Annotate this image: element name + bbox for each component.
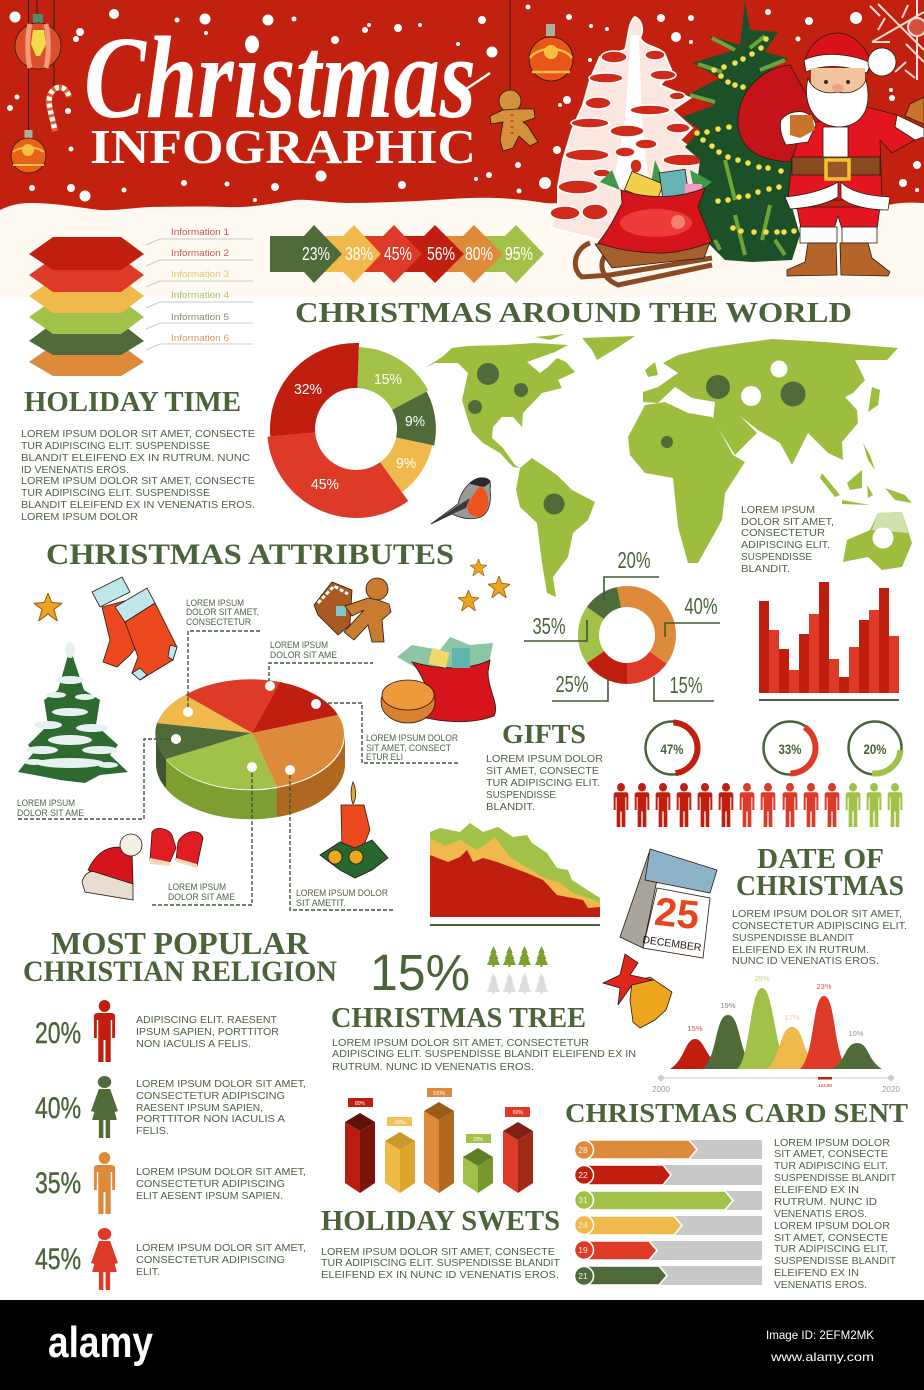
row: 20%: 20% bbox=[35, 1017, 81, 1050]
title swash bbox=[460, 73, 490, 93]
icon: stockings bbox=[92, 577, 177, 680]
percent arrow ribbon: 23% bbox=[302, 244, 330, 264]
pie labels: CONSECTETUR bbox=[186, 617, 251, 627]
bar 4: 20% bbox=[473, 1137, 484, 1143]
mountain chart: 25% bbox=[754, 974, 770, 983]
bar 5 bbox=[503, 1107, 533, 1193]
map: South America bbox=[516, 458, 595, 597]
text block: world: LOREM IPSUM bbox=[741, 504, 815, 516]
donut leaders and percent labels: 40% bbox=[684, 593, 718, 619]
text block: world: BLANDIT. bbox=[741, 563, 790, 575]
text block: swets: ELEIFEND EX IN NUNC ID VENENATIS EROS. bbox=[321, 1269, 559, 1281]
donut chart: holiday time: 32% bbox=[294, 381, 322, 398]
people pictogram row bbox=[614, 783, 902, 827]
progress bars: cards sent bbox=[574, 1140, 762, 1286]
information labels: Information 4 bbox=[171, 290, 229, 300]
mountain chart: 2000 bbox=[652, 1085, 670, 1094]
3D bar chart: holiday sweets bbox=[345, 1088, 533, 1193]
bar 4 bbox=[463, 1134, 493, 1193]
ring: 47%: 47% bbox=[660, 741, 684, 757]
mountain chart: 10% bbox=[848, 1029, 864, 1038]
icon: Santa hat bbox=[82, 834, 142, 900]
pie labels: LOREM IPSUM bbox=[17, 798, 75, 808]
pie labels: LOREM IPSUM bbox=[270, 640, 328, 650]
text block: gifts: SUSPENDISSE bbox=[486, 789, 556, 801]
heading: Most popular Christian religion: MOST POPULAR bbox=[51, 925, 310, 961]
bar 1: 80% bbox=[355, 1101, 366, 1107]
pie labels: DOLOR SIT AME bbox=[168, 892, 235, 902]
row: 45% bbox=[35, 1228, 306, 1290]
text block: cards: VENENATIS EROS. bbox=[774, 1279, 867, 1291]
donut leaders and percent labels: 25% bbox=[556, 671, 588, 697]
row: 40% bbox=[35, 1076, 306, 1138]
bar 5: 60% bbox=[513, 1110, 524, 1116]
stacked hexagon list bbox=[29, 237, 144, 376]
text block: swets bbox=[321, 1246, 561, 1281]
row: 40%: RAESENT IPSUM SAPIEN, bbox=[136, 1102, 263, 1114]
map: Britain and Japan bbox=[645, 362, 880, 412]
icon: calendar: DECEMBER bbox=[642, 934, 703, 954]
pie labels: SIT AMETIT. bbox=[296, 898, 346, 908]
3D pie chart bbox=[17, 631, 460, 910]
icon: mittens bbox=[150, 828, 203, 868]
snowfall bbox=[7, 4, 921, 202]
pie labels: LOREM IPSUM DOLOR bbox=[366, 733, 458, 743]
progress bars: cards sent: 24 bbox=[578, 1220, 588, 1230]
text block: swets: TUR ADIPISCING ELIT. SUSPENDISSE BLANDIT bbox=[321, 1257, 561, 1269]
area chart bbox=[430, 823, 600, 926]
map: Greenland bbox=[582, 336, 635, 360]
text block: world: SUSPENDISSE bbox=[741, 551, 812, 563]
bar 3 bbox=[424, 1088, 454, 1193]
illustration: green Christmas tree bbox=[682, 0, 800, 262]
row: 45%: 45% bbox=[35, 1243, 81, 1276]
map: SE Asia islands bbox=[820, 443, 912, 505]
information labels: Information 1 bbox=[171, 227, 229, 237]
hexagon 4 bbox=[29, 300, 144, 334]
percent arrow ribbon: 95% bbox=[505, 244, 533, 264]
text block: holiday time: LOREM IPSUM DOLOR bbox=[21, 511, 138, 523]
donut chart: holiday time: 9% bbox=[405, 413, 425, 430]
text block: cards: SUSPENDISSE BLANDIT bbox=[774, 1172, 897, 1184]
row: 20%: NON IACULIS A FELIS. bbox=[136, 1038, 251, 1050]
progress bars: cards sent: 31 bbox=[578, 1195, 588, 1205]
heading: Date of Christmas: DATE OF bbox=[757, 844, 884, 875]
pie labels: DOLOR SIT AME bbox=[17, 808, 84, 818]
pie labels: LOREM IPSUM DOLOR bbox=[296, 888, 388, 898]
bar 2: 60% bbox=[395, 1120, 406, 1126]
title: Christmas: Christmas bbox=[84, 12, 476, 143]
title bbox=[84, 12, 476, 174]
text block: cards: VENENATIS EROS. bbox=[774, 1208, 867, 1220]
world map bbox=[425, 334, 912, 597]
percent arrow ribbon: 38% bbox=[345, 244, 373, 264]
person rows: religion bbox=[35, 1000, 306, 1290]
text block: cards: ELEIFEND EX IN bbox=[774, 1184, 859, 1196]
row: 40%: FELIS. bbox=[136, 1125, 169, 1137]
donut chart: gifts bbox=[573, 581, 681, 689]
mountain chart: 123.58 bbox=[818, 1083, 832, 1088]
ring: 33% bbox=[754, 712, 826, 784]
text block: swets: LOREM IPSUM DOLOR SIT AMET, CONSECTE bbox=[321, 1246, 555, 1258]
mountain chart: 15% bbox=[687, 1024, 703, 1033]
percent arrow ribbon: 80% bbox=[465, 244, 493, 264]
text block: date: SUSPENDISSE BLANDIT bbox=[732, 932, 855, 944]
heading: Christmas around the world: CHRISTMAS AROUND THE WORLD bbox=[295, 297, 852, 329]
text block: cards: ELEIFEND EX IN bbox=[774, 1267, 859, 1279]
map markers bbox=[468, 363, 806, 514]
text block: date: ELEIFEND EX IN RUTRUM. bbox=[732, 944, 869, 956]
pie labels: ETUR ELI bbox=[366, 752, 403, 762]
bar 3: 100% bbox=[433, 1091, 446, 1097]
heading: Most popular Christian religion bbox=[23, 925, 337, 988]
map: Australia bbox=[843, 512, 912, 570]
heading: Christmas card sent: CHRISTMAS CARD SENT bbox=[565, 1098, 908, 1128]
donut chart: holiday time bbox=[267, 343, 436, 518]
map: arctic islands bbox=[535, 334, 565, 340]
row: 35%: CONSECTETUR ADIPISCING bbox=[136, 1178, 285, 1190]
pie labels bbox=[17, 598, 458, 908]
information labels bbox=[146, 227, 253, 350]
map: Africa bbox=[628, 402, 745, 563]
text block: world: ADIPISCING ELIT. bbox=[741, 539, 830, 551]
leader lines bbox=[17, 631, 460, 910]
text block: gifts: TUR ADIPISCING ELIT. bbox=[486, 777, 600, 789]
information labels: Information 6 bbox=[171, 333, 229, 343]
text block: date bbox=[732, 908, 907, 967]
ring: 20%: 20% bbox=[864, 741, 887, 757]
text block: gifts bbox=[486, 753, 603, 813]
row: 35% bbox=[35, 1152, 306, 1214]
page header band bbox=[0, 0, 924, 297]
donut chart: holiday time: 15% bbox=[374, 371, 402, 388]
icon: calendar bbox=[620, 849, 717, 958]
pie labels: DOLOR SIT AME bbox=[270, 650, 337, 660]
text block: cards: SUSPENDISSE BLANDIT bbox=[774, 1255, 897, 1267]
row: 40%: PORTTITOR NON IACULIS A bbox=[136, 1113, 285, 1125]
information labels: Information 3 bbox=[171, 269, 229, 279]
text block: date: LOREM IPSUM DOLOR SIT AMET, bbox=[732, 908, 902, 920]
donut leaders and percent labels bbox=[524, 547, 720, 701]
icon row: trees bbox=[487, 946, 548, 994]
row: 40%: 40% bbox=[35, 1092, 81, 1125]
progress bars: cards sent: 19 bbox=[578, 1245, 588, 1255]
icon: hanging ornaments left bbox=[11, 0, 69, 173]
text block: holiday time: BLANDIT ELEIFEND EX IN RUTRUM. NUNC bbox=[21, 452, 250, 464]
icon: gingerbread cookies bbox=[314, 578, 391, 642]
hexagon 5 bbox=[29, 323, 144, 355]
donut leaders and percent labels: 35% bbox=[532, 613, 566, 639]
pie labels: LOREM IPSUM bbox=[186, 598, 244, 608]
mountain chart: 23% bbox=[816, 982, 832, 991]
text block: world: DOLOR SIT AMET, bbox=[741, 516, 834, 528]
icon: stars bbox=[34, 559, 510, 621]
row: 35%: 35% bbox=[35, 1167, 81, 1200]
progress bars: cards sent: 22 bbox=[578, 1170, 588, 1180]
text block: tree: ADIPISCING ELIT. SUSPENDISSE BLANDIT ELEIFEND EX IN bbox=[332, 1048, 636, 1060]
row: 45%: ELIT. bbox=[136, 1266, 160, 1278]
mountain chart: 17% bbox=[784, 1013, 800, 1022]
text block: cards: SIT AMET, CONSECTE bbox=[774, 1232, 888, 1244]
bar chart bbox=[759, 582, 899, 701]
pie labels: SIT AMET, CONSECT bbox=[366, 743, 451, 753]
progress bars: cards sent: 21 bbox=[578, 1271, 588, 1281]
text block: world: CONSECTETUR bbox=[741, 527, 825, 539]
illustration: sack of gifts on sled bbox=[575, 160, 712, 285]
map: North America bbox=[425, 343, 575, 468]
text block: holiday time: TUR ADIPISCING ELIT. SUSPENDISSE bbox=[21, 440, 210, 452]
icon: bullfinch bird bbox=[431, 477, 491, 524]
progress bars: cards sent: 28 bbox=[578, 1145, 588, 1155]
text block: holiday time: LOREM IPSUM DOLOR SIT AMET, CONSECTE bbox=[21, 475, 255, 487]
text block: world bbox=[741, 504, 834, 575]
text block: cards: RUTRUM. NUNC ID bbox=[774, 1196, 877, 1208]
icon: calendar: 25 bbox=[652, 890, 701, 938]
icon: hanging ornament and gingerbread bbox=[490, 0, 573, 151]
heading: Date of Christmas: CHRISTMAS bbox=[736, 871, 904, 902]
text block: tree: RUTRUM. NUNC ID VENENATIS EROS. bbox=[332, 1061, 534, 1073]
row: 40%: CONSECTETUR ADIPISCING bbox=[136, 1090, 285, 1102]
text block: gifts: SIT AMET, CONSECTE bbox=[486, 765, 599, 777]
mountain chart: 2020 bbox=[882, 1085, 900, 1094]
text block: cards: TUR ADIPISCING ELIT. bbox=[774, 1243, 888, 1255]
text block: cards: SIT AMET, CONSECTE bbox=[774, 1148, 888, 1160]
bar 1 bbox=[345, 1098, 375, 1193]
ring: 47% bbox=[645, 721, 699, 775]
heading: Gifts: GIFTS bbox=[502, 719, 586, 749]
text block: cards: LOREM IPSUM DOLOR bbox=[774, 1220, 890, 1232]
text block: holiday time bbox=[21, 428, 255, 523]
row: 20%: ADIPISCING ELIT. RAESENT bbox=[136, 1014, 278, 1026]
heading: Christmas attributes: CHRISTMAS ATTRIBUTES bbox=[46, 538, 454, 571]
row: 20% bbox=[35, 1000, 279, 1062]
row: 35%: LOREM IPSUM DOLOR SIT AMET, bbox=[136, 1166, 306, 1178]
row: 20%: IPSUM SAPIEN, PORTTITOR bbox=[136, 1026, 279, 1038]
donut leaders and percent labels: 20% bbox=[618, 547, 650, 573]
text block: date: CONSECTETUR ADIPISCING ELIT. bbox=[732, 920, 907, 932]
hexagon 2 bbox=[29, 258, 144, 292]
pie labels: LOREM IPSUM bbox=[168, 882, 226, 892]
ring: 33%: 33% bbox=[778, 741, 802, 757]
row: 35%: ELIT AESENT IPSUM SAPIEN. bbox=[136, 1190, 283, 1202]
percent arrow ribbon: 45% bbox=[384, 244, 412, 264]
title: Infographic: INFOGRAPHIC bbox=[90, 119, 476, 174]
row: 40%: LOREM IPSUM DOLOR SIT AMET, bbox=[136, 1078, 306, 1090]
text block: cards: TUR ADIPISCING ELIT. bbox=[774, 1160, 888, 1172]
icon: snowy fir bbox=[18, 642, 128, 783]
hexagon 6 bbox=[29, 345, 144, 376]
icon: candle with holly bbox=[320, 782, 388, 878]
illustration: Santa Claus bbox=[738, 33, 924, 276]
footer logo: alamy bbox=[48, 1318, 153, 1367]
row: 45%: LOREM IPSUM DOLOR SIT AMET, bbox=[136, 1242, 306, 1254]
text block: date: NUNC ID VENENATIS EROS. bbox=[732, 955, 879, 967]
mountain chart: 19% bbox=[720, 1001, 736, 1010]
map: Eurasia bbox=[643, 339, 898, 465]
donut chart: holiday time: 45% bbox=[311, 476, 339, 493]
pie labels: DOLOR SIT AMET, bbox=[186, 607, 259, 617]
text block: tree: LOREM IPSUM DOLOR SIT AMET, CONSECTETUR bbox=[332, 1037, 589, 1049]
bar 2 bbox=[385, 1117, 415, 1193]
heading: Most popular Christian religion: CHRISTIAN RELIGION bbox=[23, 955, 337, 988]
donut leaders and percent labels: 15% bbox=[670, 672, 702, 698]
text block: cards bbox=[774, 1137, 897, 1291]
heading: Date of Christmas bbox=[736, 844, 904, 902]
text block: holiday time: TUR ADIPISCING ELIT. SUSPENDISSE bbox=[21, 487, 210, 499]
percent arrow ribbon bbox=[270, 225, 544, 283]
icon: gift sack and cake bbox=[381, 637, 496, 723]
text block: holiday time: ID VENENATIS EROS. bbox=[21, 464, 129, 476]
row: 45%: CONSECTETUR ADIPISCING bbox=[136, 1254, 285, 1266]
stat: 15%: 15% bbox=[370, 944, 470, 1001]
ring: 20% bbox=[847, 720, 903, 776]
donut chart: holiday time: 9% bbox=[396, 455, 416, 472]
icon: snowflake corner bbox=[870, 0, 924, 80]
icon: golden bell bbox=[603, 954, 672, 1028]
footer bar bbox=[0, 1300, 924, 1390]
footer image id: Image ID: 2EFM2MK bbox=[766, 1328, 874, 1342]
text block: gifts: LOREM IPSUM DOLOR bbox=[486, 753, 603, 765]
text block: holiday time: BLANDIT ELEIFEND EX IN VENENATIS EROS. bbox=[21, 499, 255, 511]
hexagon 3 bbox=[29, 279, 144, 313]
information labels: Information 5 bbox=[171, 312, 229, 322]
percent arrow ribbon: 56% bbox=[427, 244, 455, 264]
heading: Christmas tree: CHRISTMAS TREE bbox=[331, 1003, 586, 1034]
mountain chart bbox=[652, 974, 900, 1094]
information labels: Information 2 bbox=[171, 248, 229, 258]
text block: holiday time: LOREM IPSUM DOLOR SIT AMET, CONSECTE bbox=[21, 428, 255, 440]
text block: cards: LOREM IPSUM DOLOR bbox=[774, 1137, 890, 1149]
text block: gifts: BLANDIT. bbox=[486, 801, 535, 813]
illustration: white sketched pine bbox=[550, 17, 722, 240]
text block: tree bbox=[332, 1037, 636, 1073]
heading: Holiday swets: HOLIDAY SWETS bbox=[321, 1206, 560, 1237]
hexagon 1 bbox=[29, 237, 144, 270]
footer url: www.alamy.com bbox=[770, 1350, 874, 1364]
heading: Holiday time: HOLIDAY TIME bbox=[24, 387, 241, 418]
